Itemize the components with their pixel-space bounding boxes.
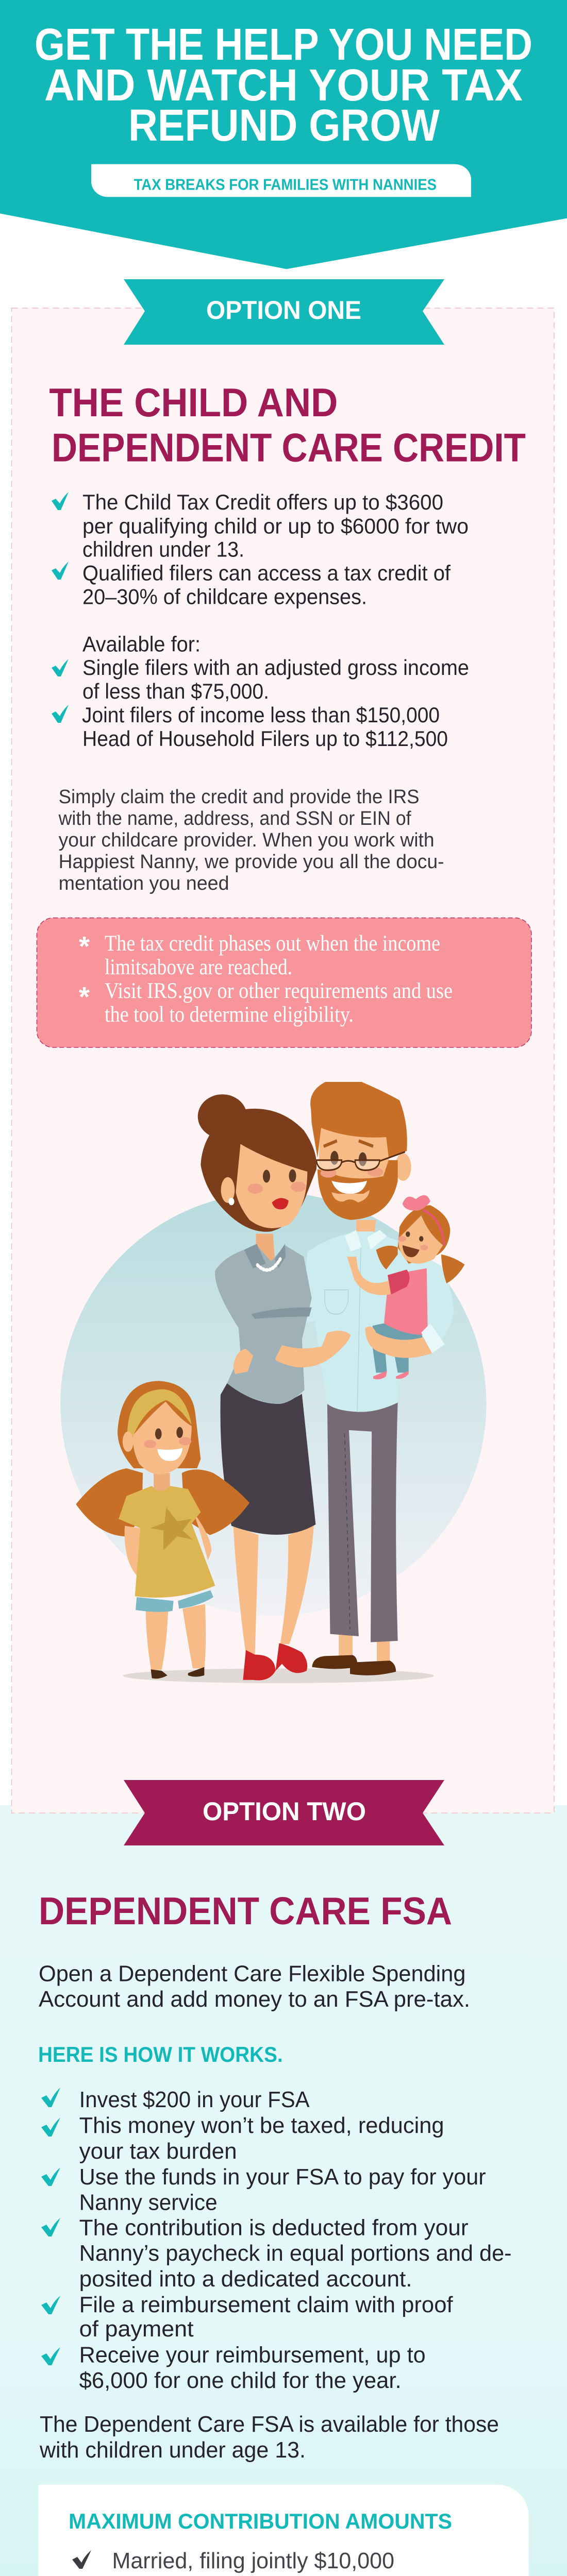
callout: phase-out notes: * <box>79 981 90 1012</box>
checklist: credit details: The Child Tax Credit offers up to $3600 <box>82 490 443 514</box>
paragraph: how to claim: Happiest Nanny, we provide you all the docu- <box>59 851 444 873</box>
ribbon: option one <box>124 279 444 345</box>
checklist: credit details: Single filers with an adjusted gross income <box>82 655 469 680</box>
callout: phase-out notes: * <box>79 931 90 962</box>
intro text: Account and add money to an FSA pre-tax. <box>39 1987 470 2012</box>
panel: maximum contribution amounts <box>38 2485 529 2576</box>
ribbon: option one: OPTION ONE <box>206 296 361 325</box>
checklist: credit details: 20–30% of childcare expenses. <box>82 584 367 608</box>
subtitle pill <box>91 164 471 197</box>
checklist: credit details: of less than $75,000. <box>82 679 269 703</box>
title <box>35 20 532 150</box>
eligibility text: with children under age 13. <box>39 2437 306 2463</box>
checklist: fsa steps: your tax burden <box>79 2139 237 2164</box>
paragraph: how to claim: mentation you need <box>59 873 229 894</box>
toddler in father's arm <box>347 1195 464 1379</box>
ribbon: option two: OPTION TWO <box>203 1797 366 1826</box>
callout: phase-out notes: limitsabove are reached. <box>105 955 292 979</box>
checklist: fsa steps <box>41 2087 512 2393</box>
checklist: fsa steps: Nanny service <box>79 2190 218 2215</box>
heading: the child and dependent care credit: THE CHILD AND <box>49 380 338 425</box>
checklist: fsa steps: Use the funds in your FSA to pay for your <box>79 2164 486 2190</box>
checklist: credit details: children under 13. <box>82 537 244 562</box>
checklist: fsa steps: File a reimbursement claim with proof <box>79 2292 453 2317</box>
title: AND WATCH YOUR TAX <box>44 60 523 110</box>
intro text: Open a Dependent Care Flexible Spending <box>39 1961 466 1987</box>
callout: phase-out notes <box>37 918 531 1047</box>
checklist: fsa steps: This money won’t be taxed, reducing <box>79 2113 444 2138</box>
panel: maximum contribution amounts: Married, filing jointly $10,000 <box>112 2548 394 2573</box>
intro text <box>39 1961 470 2012</box>
panel: maximum contribution amounts: MAXIMUM CONTRIBUTION AMOUNTS <box>69 2509 452 2533</box>
paragraph: how to claim: Simply claim the credit and provide the IRS <box>59 786 420 808</box>
checklist: fsa steps: $6,000 for one child for the year. <box>79 2368 402 2393</box>
father <box>303 1082 454 1675</box>
subheading: here is how it works: HERE IS HOW IT WORKS. <box>38 2042 283 2066</box>
checklist: fsa steps: Nanny’s paycheck in equal portions and de- <box>79 2241 512 2266</box>
checklist: credit details: per qualifying child or up to $6000 for two <box>82 514 469 538</box>
illustration: family of four on pale blue circle <box>60 1082 487 1683</box>
callout: phase-out notes: Visit IRS.gov or other requirements and use <box>105 979 453 1003</box>
paragraph: how to claim: your childcare provider. When you work with <box>59 829 435 851</box>
checklist: fsa steps: Receive your reimbursement, up to <box>79 2342 426 2368</box>
checklist: credit details: Qualified filers can access a tax credit of <box>82 561 451 585</box>
callout: phase-out notes: the tool to determine eligibility. <box>105 1003 354 1027</box>
mother <box>198 1094 316 1681</box>
older daughter <box>76 1381 249 1679</box>
checklist: fsa steps: Invest $200 in your FSA <box>79 2087 310 2112</box>
eligibility text <box>39 2412 499 2463</box>
checklist: credit details: Joint filers of income less than $150,000 <box>82 703 440 727</box>
checklist: credit details: Available for: <box>82 632 201 656</box>
ribbon: option two <box>124 1780 444 1845</box>
checklist: credit details <box>52 490 469 751</box>
panel: option one <box>11 279 554 1813</box>
section background: option two <box>0 1805 567 2576</box>
title: REFUND GROW <box>128 100 440 150</box>
callout: phase-out notes: The tax credit phases out when the income <box>105 931 440 956</box>
eligibility text: The Dependent Care FSA is available for those <box>40 2412 499 2437</box>
checklist: fsa steps: posited into a dedicated account. <box>79 2266 412 2292</box>
subtitle pill: TAX BREAKS FOR FAMILIES WITH NANNIES <box>134 175 437 194</box>
header banner <box>0 0 567 269</box>
checklist: fsa steps: of payment <box>79 2316 194 2342</box>
heading: dependent care fsa: DEPENDENT CARE FSA <box>39 1889 452 1933</box>
checklist: credit details: Head of Household Filers up to $112,500 <box>82 726 448 751</box>
paragraph: how to claim <box>58 786 444 894</box>
father's arm and hand <box>276 1331 351 1367</box>
paragraph: how to claim: with the name, address, and SSN or EIN of <box>58 808 411 829</box>
heading: the child and dependent care credit <box>49 380 526 470</box>
checklist: fsa steps: The contribution is deducted from your <box>79 2215 469 2241</box>
